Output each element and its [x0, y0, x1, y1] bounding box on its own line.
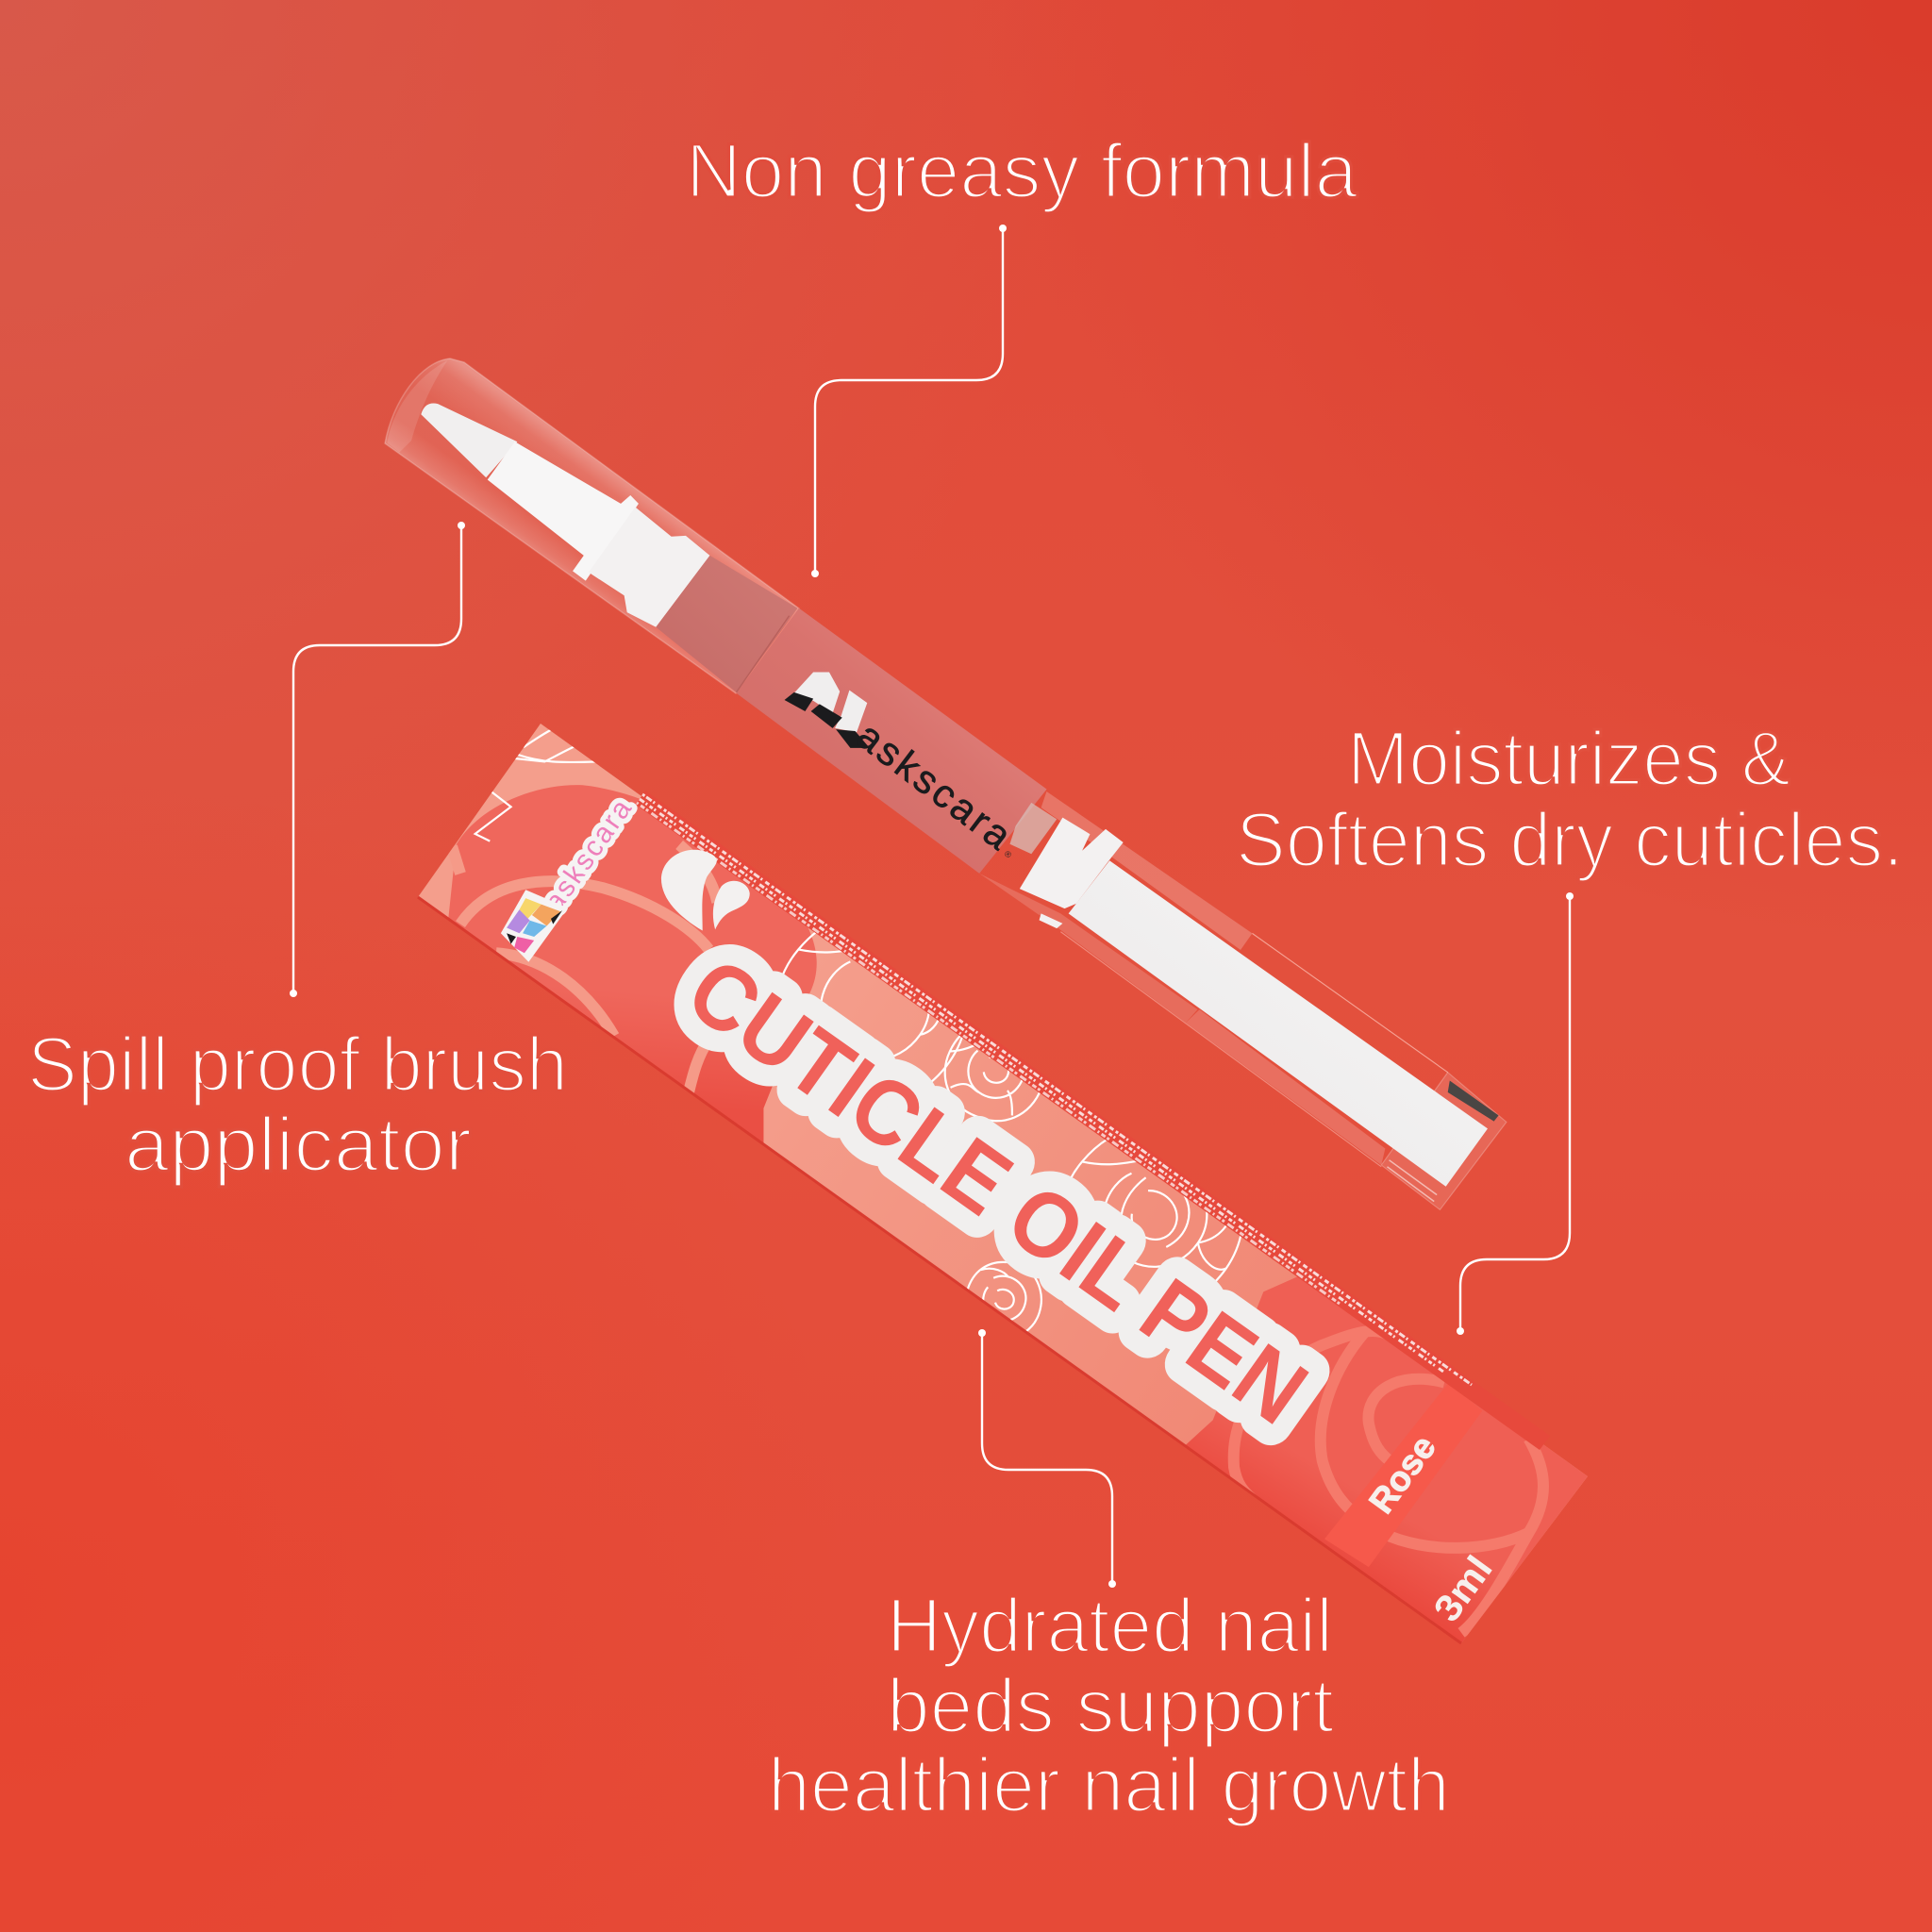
white collar: [1020, 818, 1124, 908]
start dot: [458, 522, 465, 529]
pen cap and applicator: [388, 360, 797, 692]
white neck: [589, 507, 709, 627]
seam: [737, 616, 790, 692]
heading: Spill proof brush: [27, 1022, 568, 1108]
barrel logo wordmark: askscara: [849, 713, 1020, 858]
corner rose linework: [474, 730, 596, 842]
volume label: 3ml: 3ml: [1426, 1549, 1501, 1629]
leader line: [815, 228, 1003, 574]
heading: Softens dry cuticles.: [1236, 797, 1904, 883]
brush tip: [421, 404, 517, 477]
transparent cap: [385, 358, 799, 693]
heading: applicator: [125, 1102, 472, 1188]
rose band: [1324, 1383, 1482, 1567]
box artwork: [448, 724, 1588, 1643]
end dot: [1108, 1580, 1116, 1588]
rose outlines: [741, 874, 1279, 1343]
large red blob: [448, 785, 817, 1152]
product: retail box: [418, 724, 1588, 1643]
dusty rose rod: [656, 556, 797, 692]
end dot: [290, 990, 297, 997]
end cap: [1381, 1073, 1507, 1209]
leader line: [293, 525, 461, 993]
large drop: [661, 850, 717, 931]
start dot: [978, 1329, 986, 1337]
registered mark: ®: [1003, 849, 1013, 860]
cap dome shading: [388, 360, 447, 452]
sleeve upper: [1041, 791, 1252, 950]
rose end arcs: [1234, 1331, 1543, 1633]
barrel logo mark: [785, 672, 870, 748]
start dot: [1566, 892, 1574, 900]
heading: Hydrated nail: [887, 1583, 1333, 1669]
end dot: [1457, 1327, 1464, 1335]
blob arcs: [452, 844, 717, 1095]
bottom edge line: [1060, 932, 1381, 1167]
product title sticker: CUTICLE OIL PEN: [670, 937, 1325, 1443]
heading: beds support: [887, 1663, 1334, 1749]
variant label: Rose: Rose: [1361, 1428, 1443, 1521]
sleeve lower: [979, 874, 1197, 1023]
callout: spill proof brush applicator: [27, 522, 590, 1188]
colourful M mark: [501, 890, 568, 962]
top edge line: [1252, 933, 1448, 1073]
box lower edge shadow: [418, 897, 1461, 1643]
box face: [418, 724, 1588, 1643]
white collar: [488, 441, 639, 581]
lower band: [1186, 1009, 1385, 1165]
callout: non greasy formula: [686, 128, 1357, 577]
end reflections: [1387, 1160, 1437, 1202]
leader line: [982, 1333, 1112, 1584]
heading: healthier nail growth: [768, 1742, 1450, 1828]
side strip with micro print: [636, 791, 1550, 1450]
small clip: [1040, 913, 1062, 928]
callout: hydrated nail beds: [768, 1329, 1450, 1828]
pen barrel: [737, 608, 1047, 874]
end dot: [811, 570, 819, 577]
box brand sticker: [501, 794, 638, 962]
callout: moisturizes and softens: [1236, 716, 1904, 1335]
heading: Moisturizes &: [1347, 716, 1790, 802]
metal end: [1448, 1081, 1499, 1122]
rose end panel: [1186, 1273, 1588, 1643]
product: cuticle oil pen: [385, 358, 1507, 1209]
barrel body: [737, 608, 1047, 874]
white rod: [1069, 860, 1488, 1187]
droplet icons: [661, 850, 750, 931]
heading: Non greasy formula: [686, 128, 1357, 214]
sticker wordmark: askscara: [539, 794, 638, 917]
small drop: [713, 881, 750, 929]
start dot: [999, 225, 1007, 232]
leader line: [1460, 896, 1570, 1331]
metal spring: [1009, 803, 1057, 854]
pen tube lower half: [979, 791, 1507, 1209]
